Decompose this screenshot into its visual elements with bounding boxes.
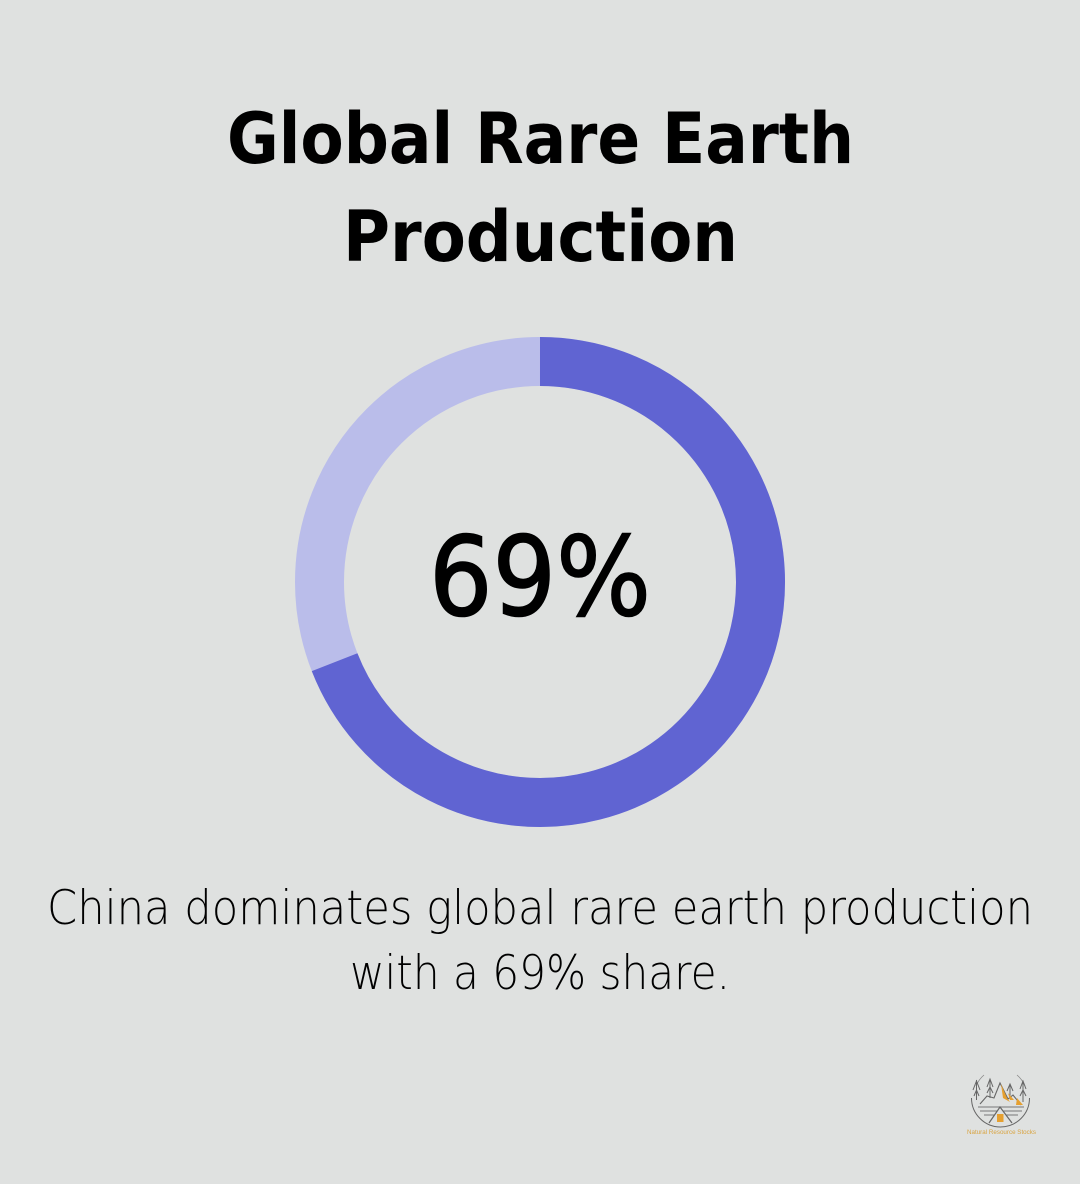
description text: with a 69% share.	[350, 946, 730, 1001]
icon: Natural Resource Stocks logo: Natural Resource Stocks	[967, 1129, 1037, 1136]
donut chart: 69% share	[320, 362, 760, 802]
description text	[47, 881, 1033, 1001]
donut value: 69%	[429, 513, 651, 641]
title: Global Rare Earth	[227, 98, 854, 180]
icon: Natural Resource Stocks logo	[967, 1075, 1037, 1136]
title: Production	[343, 196, 738, 278]
title	[227, 98, 854, 278]
